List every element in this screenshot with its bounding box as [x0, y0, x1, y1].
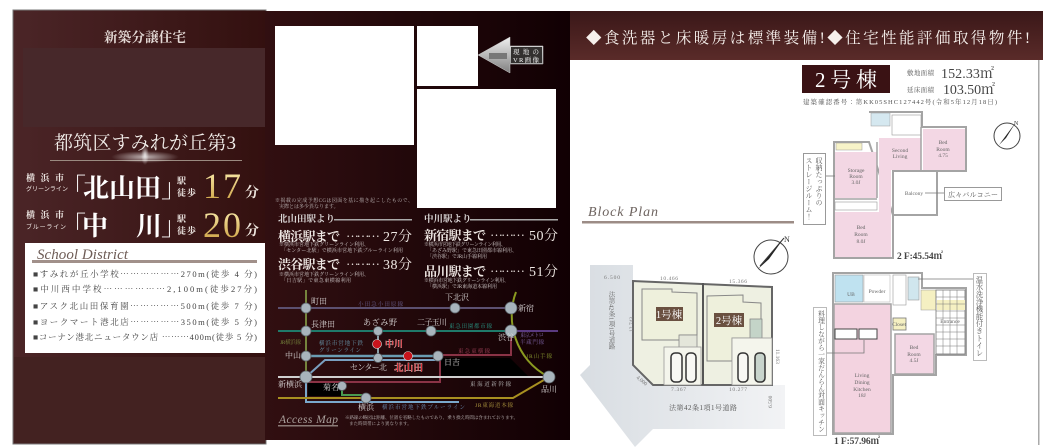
room labels: Kitchen — [853, 387, 871, 393]
site and floor area: 敷地面積 — [907, 68, 934, 77]
travel times from Kitayamata: ……… — [346, 254, 380, 273]
room labels: Living — [855, 373, 870, 379]
travel times from Kitayamata: ……… — [346, 226, 380, 245]
floor plan: second floor — [804, 112, 1020, 262]
dimensions and road names — [604, 275, 780, 412]
room labels: Bed — [857, 225, 866, 231]
room labels — [848, 140, 950, 245]
callout: storage room: 収納たっぷりの — [815, 156, 823, 206]
room labels: Storage — [848, 168, 865, 174]
arrow: local VR image: VR画像 — [513, 55, 540, 64]
roads — [580, 265, 785, 447]
dimensions and road names: 4.000 — [635, 375, 648, 388]
travel times from Kitayamata: 38分 — [383, 257, 412, 273]
access row: Kitayamata station: 横浜市 — [26, 172, 64, 183]
panel: photos, travel times and access map — [265, 11, 570, 440]
station labels: センター北 — [350, 362, 387, 372]
access row: Kitayamata station: 「 — [60, 174, 86, 203]
station labels: 二子玉川 — [417, 317, 447, 327]
building certification number: 建築確認番号：第KK05SHC127442号(令和5年12月18日) — [803, 97, 997, 106]
station labels: 新横浜 — [278, 379, 303, 389]
school district heading: School District — [37, 247, 129, 263]
header banner: ◆食洗器と床暖房は標準装備!◆住宅性能評価取得物件! — [586, 29, 1030, 47]
stations — [300, 302, 555, 403]
room labels: Room — [854, 232, 868, 238]
access row: Kitayamata station — [26, 166, 259, 206]
icon: compass — [754, 235, 790, 274]
access row: Kitayamata station: 分 — [245, 184, 259, 201]
access row: Kitayamata station: 17 — [203, 166, 241, 206]
line labels: 東海道新幹線 — [470, 380, 511, 388]
travel times from Nakagawa: 「あざみ野駅」で東急田園都市線利用、 — [427, 247, 517, 254]
photo placeholder 2 — [417, 26, 478, 86]
callout: toilet: 温水洗浄機能付きトイレ — [975, 275, 984, 356]
kitchen counter — [835, 329, 877, 339]
travel times from Kitayamata — [278, 213, 412, 284]
school list: ■コーナン港北ニュータウン店 ………400m(徒歩 5 分) — [33, 331, 257, 343]
travel times from Kitayamata: 北山田駅より — [278, 213, 335, 225]
photo placeholder 3 — [417, 89, 556, 208]
access map — [278, 290, 558, 427]
station labels: 長津田 — [311, 319, 335, 329]
line labels: 横浜市営地下鉄 — [319, 339, 363, 347]
room labels: Balcony — [905, 191, 923, 197]
lot — [633, 281, 772, 385]
callout: toilet — [918, 274, 986, 360]
callout: kitchen — [814, 308, 864, 436]
access row: Kitayamata station: グリーンライン — [26, 185, 68, 193]
room labels: 4.5J — [909, 358, 919, 364]
line labels: 東京メトロ — [520, 331, 544, 339]
access row: Nakagawa station: 横浜市 — [26, 209, 64, 220]
room labels: Second — [892, 148, 908, 154]
room labels: Room — [907, 352, 921, 358]
dimensions and road names: 6.500 — [604, 275, 620, 281]
callout: balcony: 広々バルコニー — [948, 190, 998, 199]
callout: kitchen: 料理しながら一家だんらん対面キッチン — [816, 309, 825, 432]
cars — [671, 353, 765, 382]
room labels — [847, 289, 960, 399]
building lot 2 — [707, 295, 772, 385]
travel times from Nakagawa: 中川駅より — [424, 213, 472, 225]
travel times from Kitayamata: 「日吉駅」で東急東横線利用 — [281, 277, 351, 284]
travel times from Nakagawa: ※横浜市営地下鉄グリーンライン利用、 — [424, 277, 509, 284]
travel times from Nakagawa: 50分 — [529, 228, 558, 244]
station labels: 渋谷 — [498, 332, 514, 342]
travel times from Kitayamata: 「センター北駅」で横浜市営地下鉄ブルーライン利用 — [281, 247, 403, 254]
station labels: 新宿 — [518, 303, 534, 313]
access row: Nakagawa station: 「 — [60, 212, 86, 241]
photo note — [275, 197, 413, 210]
line labels: 小田急小田原線 — [358, 300, 403, 308]
access row: Kitayamata station: 駅 — [176, 176, 186, 186]
property name: 都筑区すみれが丘第3 — [54, 132, 236, 154]
line labels: JR山手線 — [526, 352, 552, 360]
dimensions and road names: 11.163 — [774, 349, 780, 364]
station labels: 町田 — [311, 297, 327, 306]
travel times from Nakagawa: ……… — [490, 261, 525, 280]
photo note: 実際とは多少異なります。 — [279, 203, 339, 210]
travel times from Nakagawa: 品川駅まで — [424, 264, 486, 279]
room labels: Entrance — [940, 319, 960, 325]
site and floor area: 152.33㎡ — [941, 66, 994, 82]
dimensions and road names: 12.743 — [629, 317, 635, 332]
first floor area: 1 F:57.96㎡ — [834, 436, 880, 447]
second floor area: 2 F:45.54㎡ — [897, 251, 943, 262]
access row: Nakagawa station: 20 — [203, 205, 241, 245]
photo note: ※掲載の完成予想CGは図面を基に描き起こしたもので、 — [275, 197, 413, 204]
travel times from Kitayamata: ※横浜市営地下鉄グリーンライン利用、 — [279, 271, 369, 278]
panel: school district — [25, 243, 265, 353]
travel times from Nakagawa: 「横浜駅」でJR東海道本線利用 — [427, 283, 497, 290]
access row: Nakagawa station — [26, 205, 259, 245]
dimensions and road names: 7.367 — [671, 387, 686, 393]
access row: Nakagawa station: 」 — [161, 212, 187, 241]
access row: Nakagawa station: 中 — [82, 212, 108, 241]
school list: ■アスク北山田保育園……………500m(徒歩 7 分) — [33, 300, 257, 312]
school list: ■すみれが丘小学校………………270m(徒歩 4 分) — [33, 268, 257, 280]
line labels: 横浜市営地下鉄ブルーライン — [382, 403, 465, 411]
line labels: JR横浜線 — [280, 338, 301, 346]
line labels — [280, 300, 552, 411]
entrance tile grid — [936, 290, 965, 354]
dimensions and road names: 法第42条1項1号道路 — [608, 290, 615, 351]
site and floor area: 103.50㎡ — [943, 82, 995, 98]
room labels: 4.75 — [938, 153, 948, 159]
station labels: 北山田 — [394, 362, 423, 374]
floor plan: first floor — [814, 273, 986, 447]
callout: balcony — [925, 188, 1002, 200]
panel: property summary — [13, 10, 266, 444]
station labels: 中川 — [385, 338, 403, 349]
icon: floor plan compass: N — [1014, 121, 1019, 127]
access row: Nakagawa station: 川 — [136, 212, 162, 241]
room labels: 3.0J — [851, 180, 861, 186]
block plan heading: Block Plan — [588, 205, 658, 220]
school list: ■中川西中学校………………2,100m(徒歩27分) — [33, 283, 257, 295]
building heading: 2号棟 — [815, 68, 877, 92]
travel times from Nakagawa: ※横浜市営地下鉄グリーンライン利用、 — [424, 241, 506, 248]
access row: Kitayamata station: 」 — [161, 174, 187, 203]
room labels: Powder — [869, 289, 886, 295]
building lot 2: 2号棟 — [716, 314, 743, 327]
arrow: local VR image — [478, 37, 543, 73]
travel times from Nakagawa: 新宿駅まで — [424, 228, 486, 243]
travel times from Kitayamata: ※横浜市営地下鉄グリーンライン利用、 — [279, 241, 369, 248]
station labels: 下北沢 — [445, 292, 469, 302]
map note: ※路線の略図は距離、位置を省略したものであり、乗り換え時間は含まれております。 — [345, 414, 518, 421]
room labels: UB — [847, 292, 855, 298]
photo placeholder 1 — [275, 26, 414, 145]
access row: Kitayamata station: 徒歩 — [177, 187, 197, 198]
room labels: Closet — [892, 322, 906, 328]
dimensions and road names: 6.500 — [768, 395, 774, 408]
building lot 1 — [642, 289, 701, 385]
station labels: あざみ野 — [363, 317, 397, 327]
arrow: local VR image: 現地の — [513, 47, 539, 56]
line labels: 東急東横線 — [458, 347, 490, 355]
rail lines — [278, 290, 558, 402]
map note: また時間帯により異なります。 — [349, 420, 412, 427]
travel times from Nakagawa — [424, 213, 558, 290]
line labels: 東急田園都市線 — [449, 322, 492, 330]
travel times from Kitayamata: 横浜駅まで — [278, 229, 340, 244]
station labels — [278, 292, 557, 412]
room labels: Dining — [854, 380, 870, 386]
callout: storage room — [804, 154, 835, 224]
access row: Kitayamata station: 北山田 — [83, 174, 161, 203]
access row: Nakagawa station: 駅 — [176, 214, 186, 224]
highlighted stations — [372, 340, 412, 360]
station labels: 品川 — [541, 384, 557, 394]
icon: floor plan compass — [994, 121, 1020, 149]
header banner — [570, 11, 1043, 60]
map note — [345, 414, 518, 427]
line labels: グリーンライン — [319, 346, 361, 354]
travel times from Nakagawa: 「渋谷駅」でJR山手線利用 — [427, 253, 487, 260]
room labels: Room — [849, 174, 863, 180]
callout: storage room: ストレージルーム！ — [805, 157, 813, 220]
school list — [33, 268, 257, 343]
room labels: 18J — [858, 393, 867, 399]
icon: compass: N — [784, 235, 790, 244]
block plan — [580, 265, 785, 447]
building heading — [802, 65, 890, 93]
dimensions and road names: 法第42条1項1号道路 — [669, 403, 737, 412]
travel times from Nakagawa: ……… — [490, 225, 525, 244]
room labels: Living — [893, 154, 908, 160]
room labels: Room — [936, 147, 950, 153]
travel times from Nakagawa: 51分 — [529, 264, 558, 280]
subtitle: 新築分譲住宅 — [104, 29, 186, 45]
station labels: 横浜 — [358, 402, 375, 412]
travel times from Kitayamata: 渋谷駅まで — [278, 257, 340, 272]
sparkle divider — [50, 145, 242, 165]
dimensions and road names: 15.366 — [729, 279, 747, 285]
site and floor area — [907, 66, 995, 98]
travel times from Kitayamata: 27分 — [383, 229, 412, 245]
dimensions and road names: 10.277 — [729, 387, 747, 393]
line labels: 半蔵門線 — [520, 338, 544, 346]
station labels: 中山 — [285, 350, 301, 360]
panel: floor plans and block plan — [570, 11, 1043, 447]
room labels: 8.0J — [856, 239, 866, 245]
room labels: Bed — [939, 140, 948, 146]
line labels: JR東海道本線 — [475, 401, 513, 409]
access row: Nakagawa station: 分 — [245, 222, 259, 239]
access map heading: Access Map — [278, 414, 338, 426]
building lot 1: 1号棟 — [656, 308, 683, 321]
access row: Nakagawa station: 徒歩 — [177, 225, 197, 236]
school list: ■ヨークマート港北店……………350m(徒歩 5 分) — [33, 316, 257, 328]
site and floor area: 延床面積 — [907, 85, 934, 94]
dimensions and road names: 10.466 — [660, 276, 678, 282]
station labels: 日吉 — [444, 357, 460, 367]
station labels: 菊名 — [323, 382, 339, 392]
access row: Nakagawa station: ブルーライン — [26, 223, 66, 231]
room labels: Bed — [910, 345, 919, 351]
